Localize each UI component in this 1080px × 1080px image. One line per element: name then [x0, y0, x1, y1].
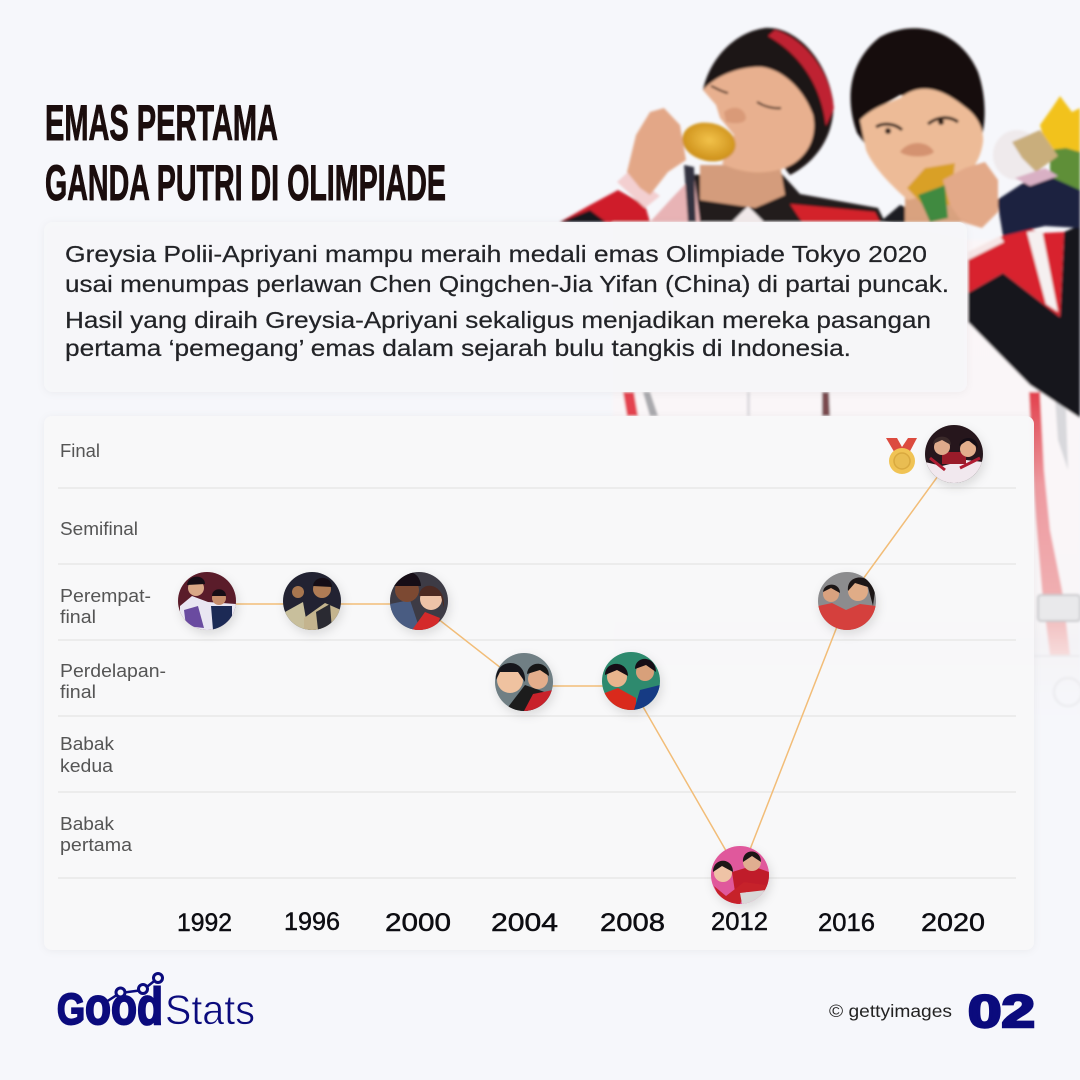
y axis labels: final [60, 607, 96, 627]
text block: first paragraph: usai menumpas perlawan Chen Qingchen-Jia Yifan (China) di partai puncak. [65, 271, 949, 297]
avatar 2000 [390, 572, 448, 630]
red sleeve [968, 228, 1064, 317]
y axis labels: Perdelapan- [60, 661, 166, 681]
y axis labels: Babak [60, 814, 115, 834]
jersey body [613, 222, 1080, 720]
y axis labels: kedua [60, 756, 114, 776]
x axis years: 2000 [385, 909, 451, 937]
text block: first paragraph: Greysia Polii-Apriyani mampu meraih medali emas Olimpiade Tokyo 2020 [65, 241, 927, 267]
dark wrap [997, 172, 1080, 236]
left jersey shoulders [560, 190, 650, 222]
avatar 2004 [495, 653, 553, 711]
x axis years: 2020 [921, 909, 985, 937]
icon: gold medal [886, 438, 917, 474]
text block: first paragraph [65, 241, 949, 297]
left woman headband [768, 30, 834, 126]
text block: second paragraph: pertama ‘pemegang’ emas dalam sejarah bulu tangkis di Indonesia. [65, 335, 851, 361]
y axis labels: Semifinal [60, 519, 138, 539]
left woman face [703, 67, 814, 172]
right jersey shoulder [880, 205, 945, 222]
title [45, 95, 446, 211]
avatar 1996 [283, 572, 341, 630]
avatar 2008 [602, 652, 660, 710]
avatar 2020 [925, 425, 983, 483]
x axis years: 2016 [818, 909, 875, 937]
title: GANDA PUTRI DI OLIMPIADE [45, 155, 446, 211]
avatar 2012 [711, 846, 769, 904]
right medal [907, 163, 955, 205]
y axis labels [60, 441, 166, 855]
left woman hair [703, 28, 833, 175]
page number: 02 [968, 986, 1035, 1037]
text block: second paragraph [65, 307, 931, 361]
right woman hand [943, 162, 998, 228]
logo: GoodStats: Good [57, 978, 163, 1036]
x axis years [177, 908, 985, 937]
x axis years: 2012 [711, 908, 768, 936]
title: EMAS PERTAMA [45, 95, 278, 151]
right woman face [860, 89, 983, 200]
logo: GoodStats: Stats [165, 986, 255, 1033]
left woman hand [627, 108, 686, 195]
line chart connector [207, 454, 954, 875]
black sleeve [968, 225, 1080, 418]
y axis labels: pertama [60, 835, 133, 855]
panel: chart [44, 416, 1034, 950]
x axis years: 1996 [284, 908, 340, 936]
mascot [993, 130, 1041, 180]
x axis years: 2004 [491, 909, 558, 937]
right woman hair [851, 28, 985, 145]
right woman neck [905, 190, 975, 222]
logo: GoodStats [57, 974, 255, 1036]
left woman neck [700, 165, 785, 208]
avatar 2016 [818, 572, 876, 630]
photo: Greysia and Apriyani kissing their gold medals [560, 28, 1080, 720]
panel: description [44, 222, 967, 392]
y axis labels: Final [60, 441, 100, 461]
x axis years: 1992 [177, 909, 232, 937]
text block: second paragraph: Hasil yang diraih Greysia-Apriyani sekaligus menjadikan mereka pasangan [65, 307, 931, 333]
flowers [1040, 96, 1080, 200]
y axis labels: final [60, 682, 96, 702]
avatar 1992 [178, 572, 236, 630]
y axis labels: Babak [60, 734, 115, 754]
left medal [679, 118, 739, 166]
x axis years: 2008 [600, 909, 665, 937]
body details: stripes [623, 392, 1080, 706]
y axis labels: Perempat- [60, 586, 151, 606]
photo credit: © gettyimages [829, 1001, 952, 1021]
